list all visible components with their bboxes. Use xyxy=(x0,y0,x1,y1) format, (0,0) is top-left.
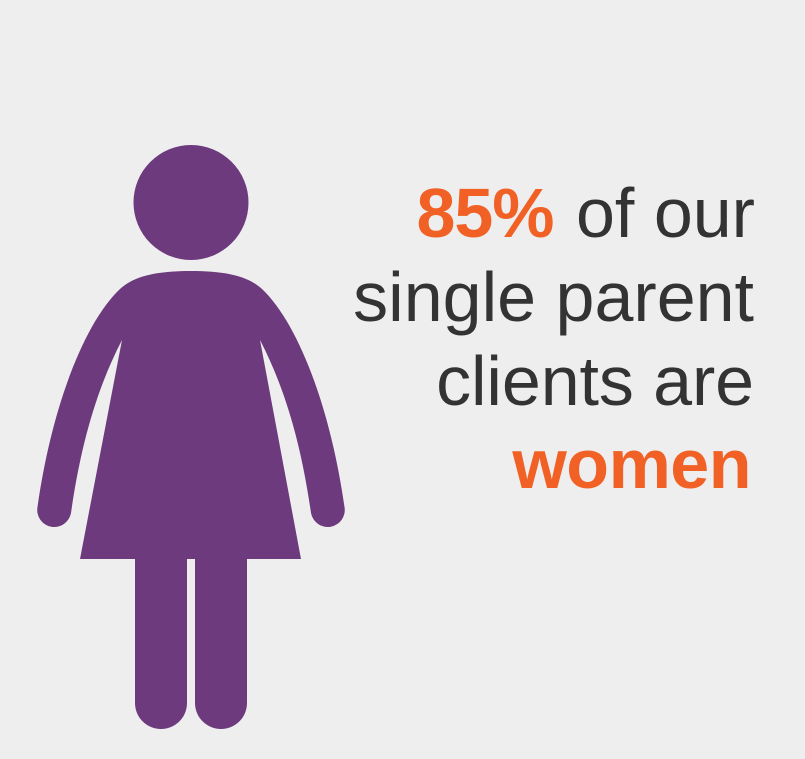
text block: statistic: clients are xyxy=(436,342,754,420)
text block: statistic: single parent xyxy=(353,258,754,336)
text block: statistic xyxy=(353,174,755,503)
text block: statistic: women xyxy=(512,425,751,503)
text block: statistic: 85% of our xyxy=(416,174,755,252)
